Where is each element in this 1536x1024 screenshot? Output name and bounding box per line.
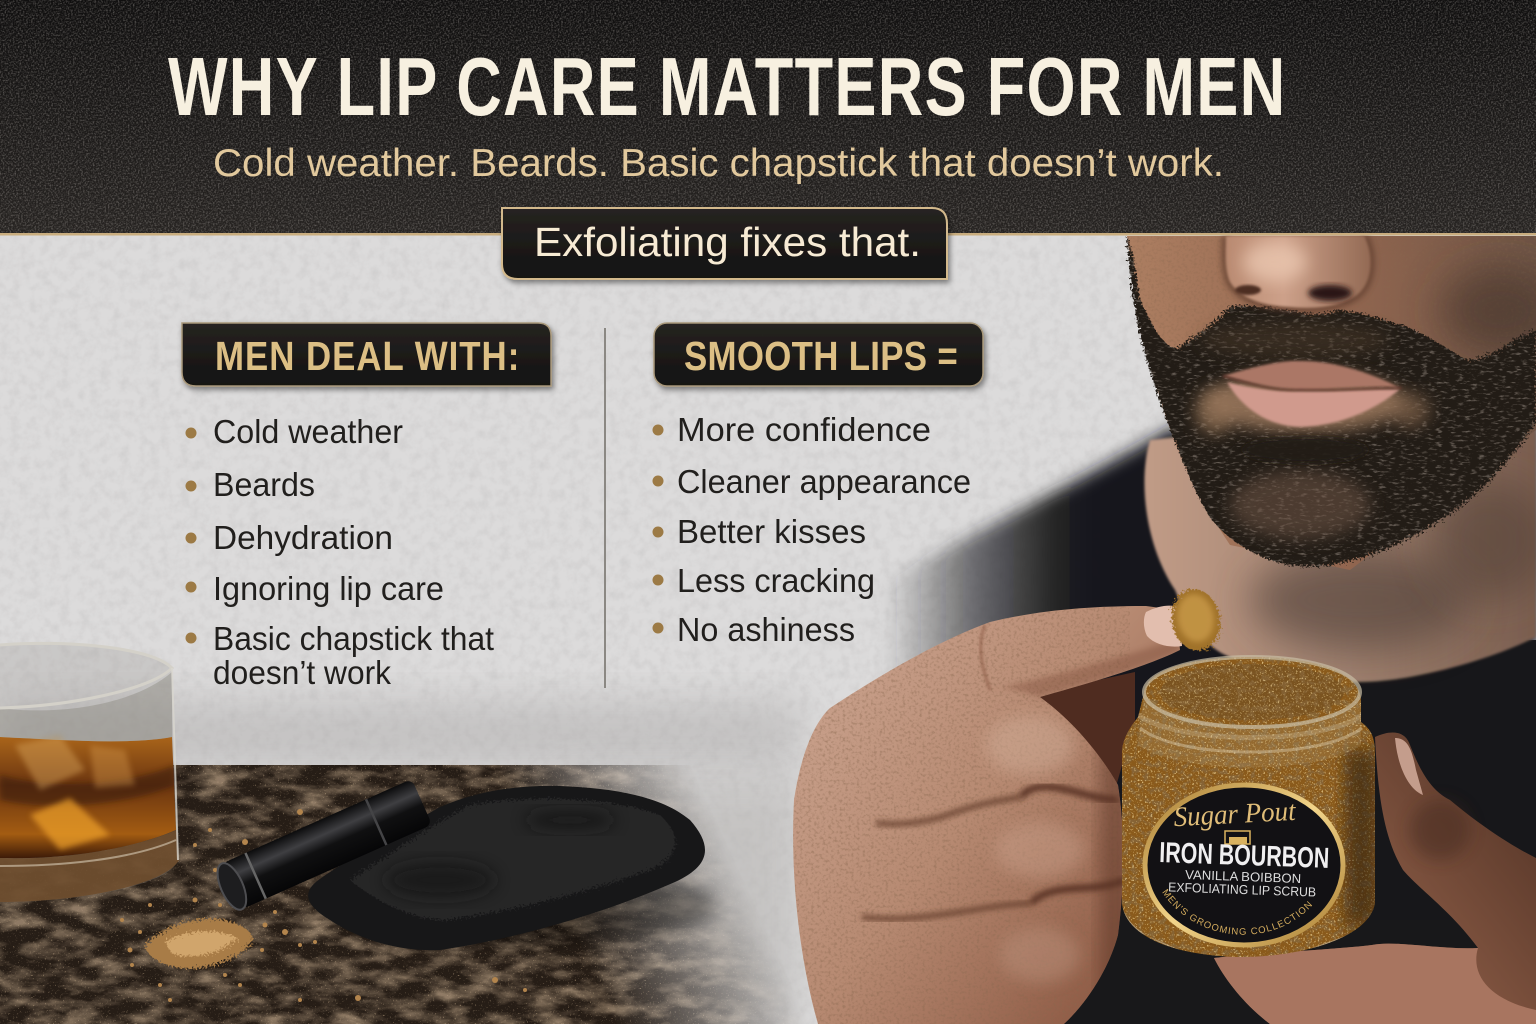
gold emblem [1225,831,1250,844]
panel: men deal with [182,323,551,691]
item: better kisses: Better kisses [677,513,866,550]
jar of lip scrub [1122,655,1375,957]
item: less cracking: Less cracking [677,562,875,599]
column divider [604,328,606,688]
black exfoliating cloth [308,786,715,950]
right hand fingers [1214,732,1536,1024]
man's neck [1144,400,1536,682]
item: no ashiness: No ashiness [677,611,855,648]
item: basic chapstick: Basic chapstick that [213,620,494,657]
nose [1226,236,1370,308]
panel: smooth lips [652,323,983,648]
item: dehydration: Dehydration [213,519,393,556]
heading badge: SMOOTH LIPS = [684,334,958,380]
item: ignoring lip care: Ignoring lip care [213,570,444,607]
item: beards: Beards [213,466,315,503]
thumbnail [1144,606,1182,647]
man's face [1125,236,1536,571]
man's shirt [885,420,1536,1024]
item: basic chapstick: doesn’t work [213,654,391,691]
callout: exfoliating fixes that [502,208,947,279]
countertop with spilled sugar [0,765,830,1024]
web of hand behind index finger [1030,672,1135,790]
heading badge: MEN DEAL WITH: [215,334,519,380]
left hand holding sugar [790,600,1182,1024]
sugar scrub on fingertip [1167,585,1225,655]
product name: IRON BOURBON [1159,837,1330,875]
item: basic chapstick [186,620,494,691]
brand script: Sugar Pout [1173,796,1297,833]
whisky glass [0,643,179,902]
heading badge [182,323,551,386]
product label [1142,782,1346,948]
header band [0,0,1536,236]
scent: VANILLA BOIBBON [1185,867,1301,886]
lip balm tube [212,779,432,914]
item: cold weather: Cold weather [213,413,403,450]
product type: EXFOLIATING LIP SCRUB [1168,879,1316,900]
subtitle: Cold weather. Beards. Basic chapstick that doesn’t work. [213,142,1224,185]
title: WHY LIP CARE MATTERS FOR MEN [168,40,1285,133]
lips [1223,361,1402,427]
callout: exfoliating fixes that: Exfoliating fixes that. [534,219,921,265]
item: more confidence: More confidence [677,411,931,448]
collection line: MEN'S GROOMING COLLECTION [1162,888,1312,935]
spilled sugar pile [120,809,527,1002]
beard [1125,236,1536,571]
item: cleaner appearance: Cleaner appearance [677,463,971,500]
heading badge [654,323,983,386]
